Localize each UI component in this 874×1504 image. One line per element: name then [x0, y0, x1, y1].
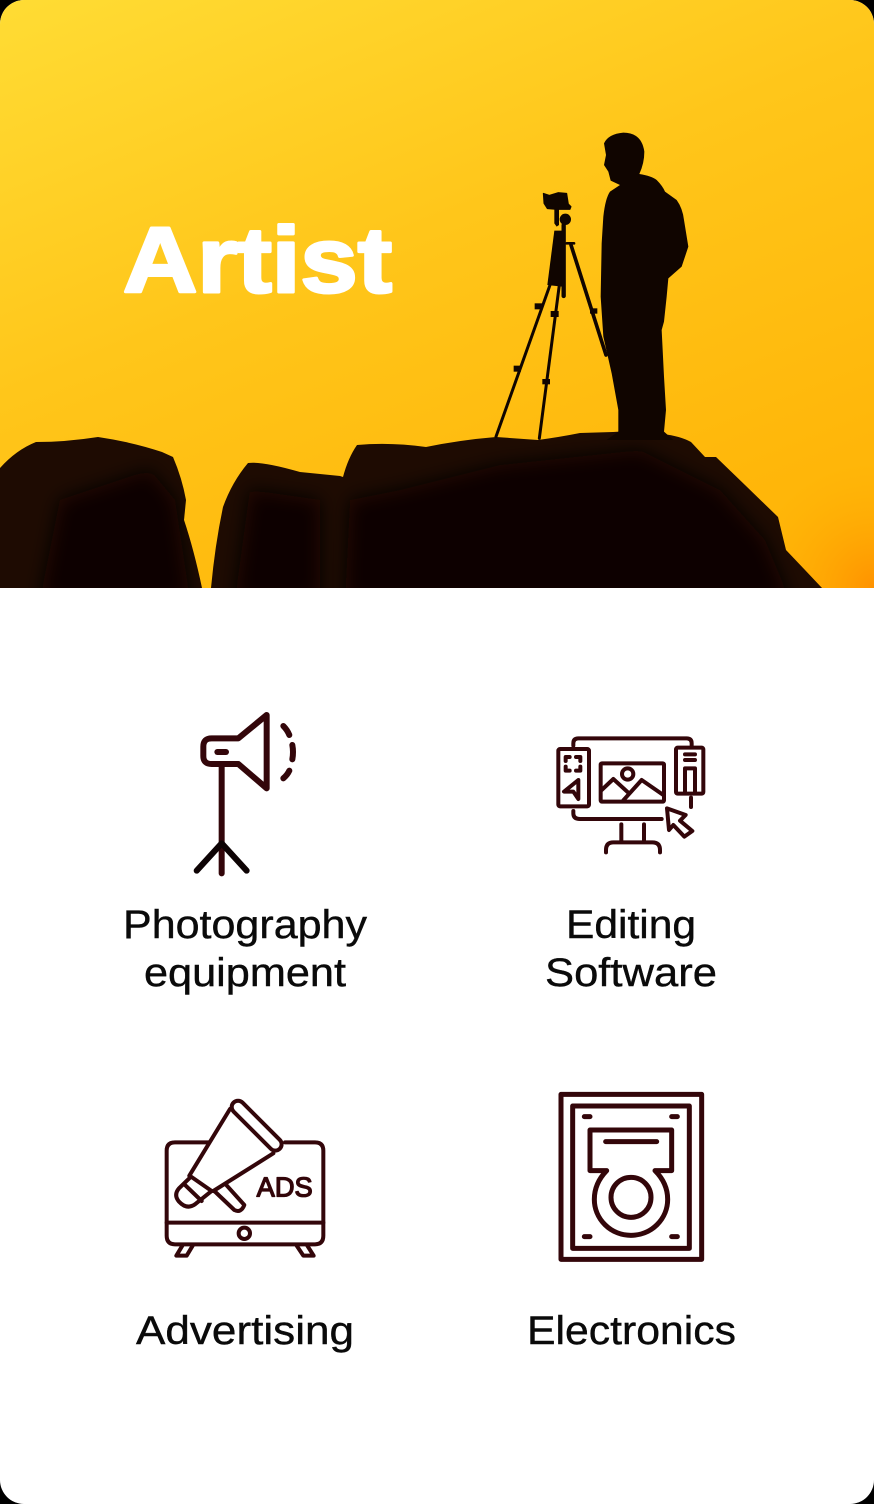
photographer with backpack	[601, 133, 688, 440]
tripod and camera	[496, 193, 606, 438]
card: advertising	[136, 1098, 354, 1353]
icon: monitor with image editing panels	[558, 738, 703, 852]
label: photography equipment	[123, 903, 367, 995]
label: editing software	[546, 908, 716, 987]
title: Artist	[123, 208, 392, 312]
icon: studio light on stand	[197, 715, 293, 873]
icon: megaphone over screen with ADS	[167, 1098, 323, 1256]
card: editing software	[545, 738, 717, 995]
icon: hard disk drive	[561, 1094, 702, 1259]
label: editing software: Editing	[566, 903, 696, 947]
rocks silhouette	[0, 432, 822, 588]
card: electronics	[527, 1094, 736, 1353]
label: advertising: Advertising	[136, 1309, 354, 1353]
icon: megaphone over screen with ADS: ADS	[257, 1172, 313, 1203]
label: photography equipment: equipment	[144, 951, 346, 995]
card: photography equipment	[123, 715, 367, 995]
label: photography equipment: Photography	[123, 903, 367, 947]
hero photo: photographer silhouette on rocks at sunset	[0, 0, 874, 600]
label: electronics: Electronics	[527, 1309, 736, 1353]
label: editing software: Software	[545, 951, 717, 995]
